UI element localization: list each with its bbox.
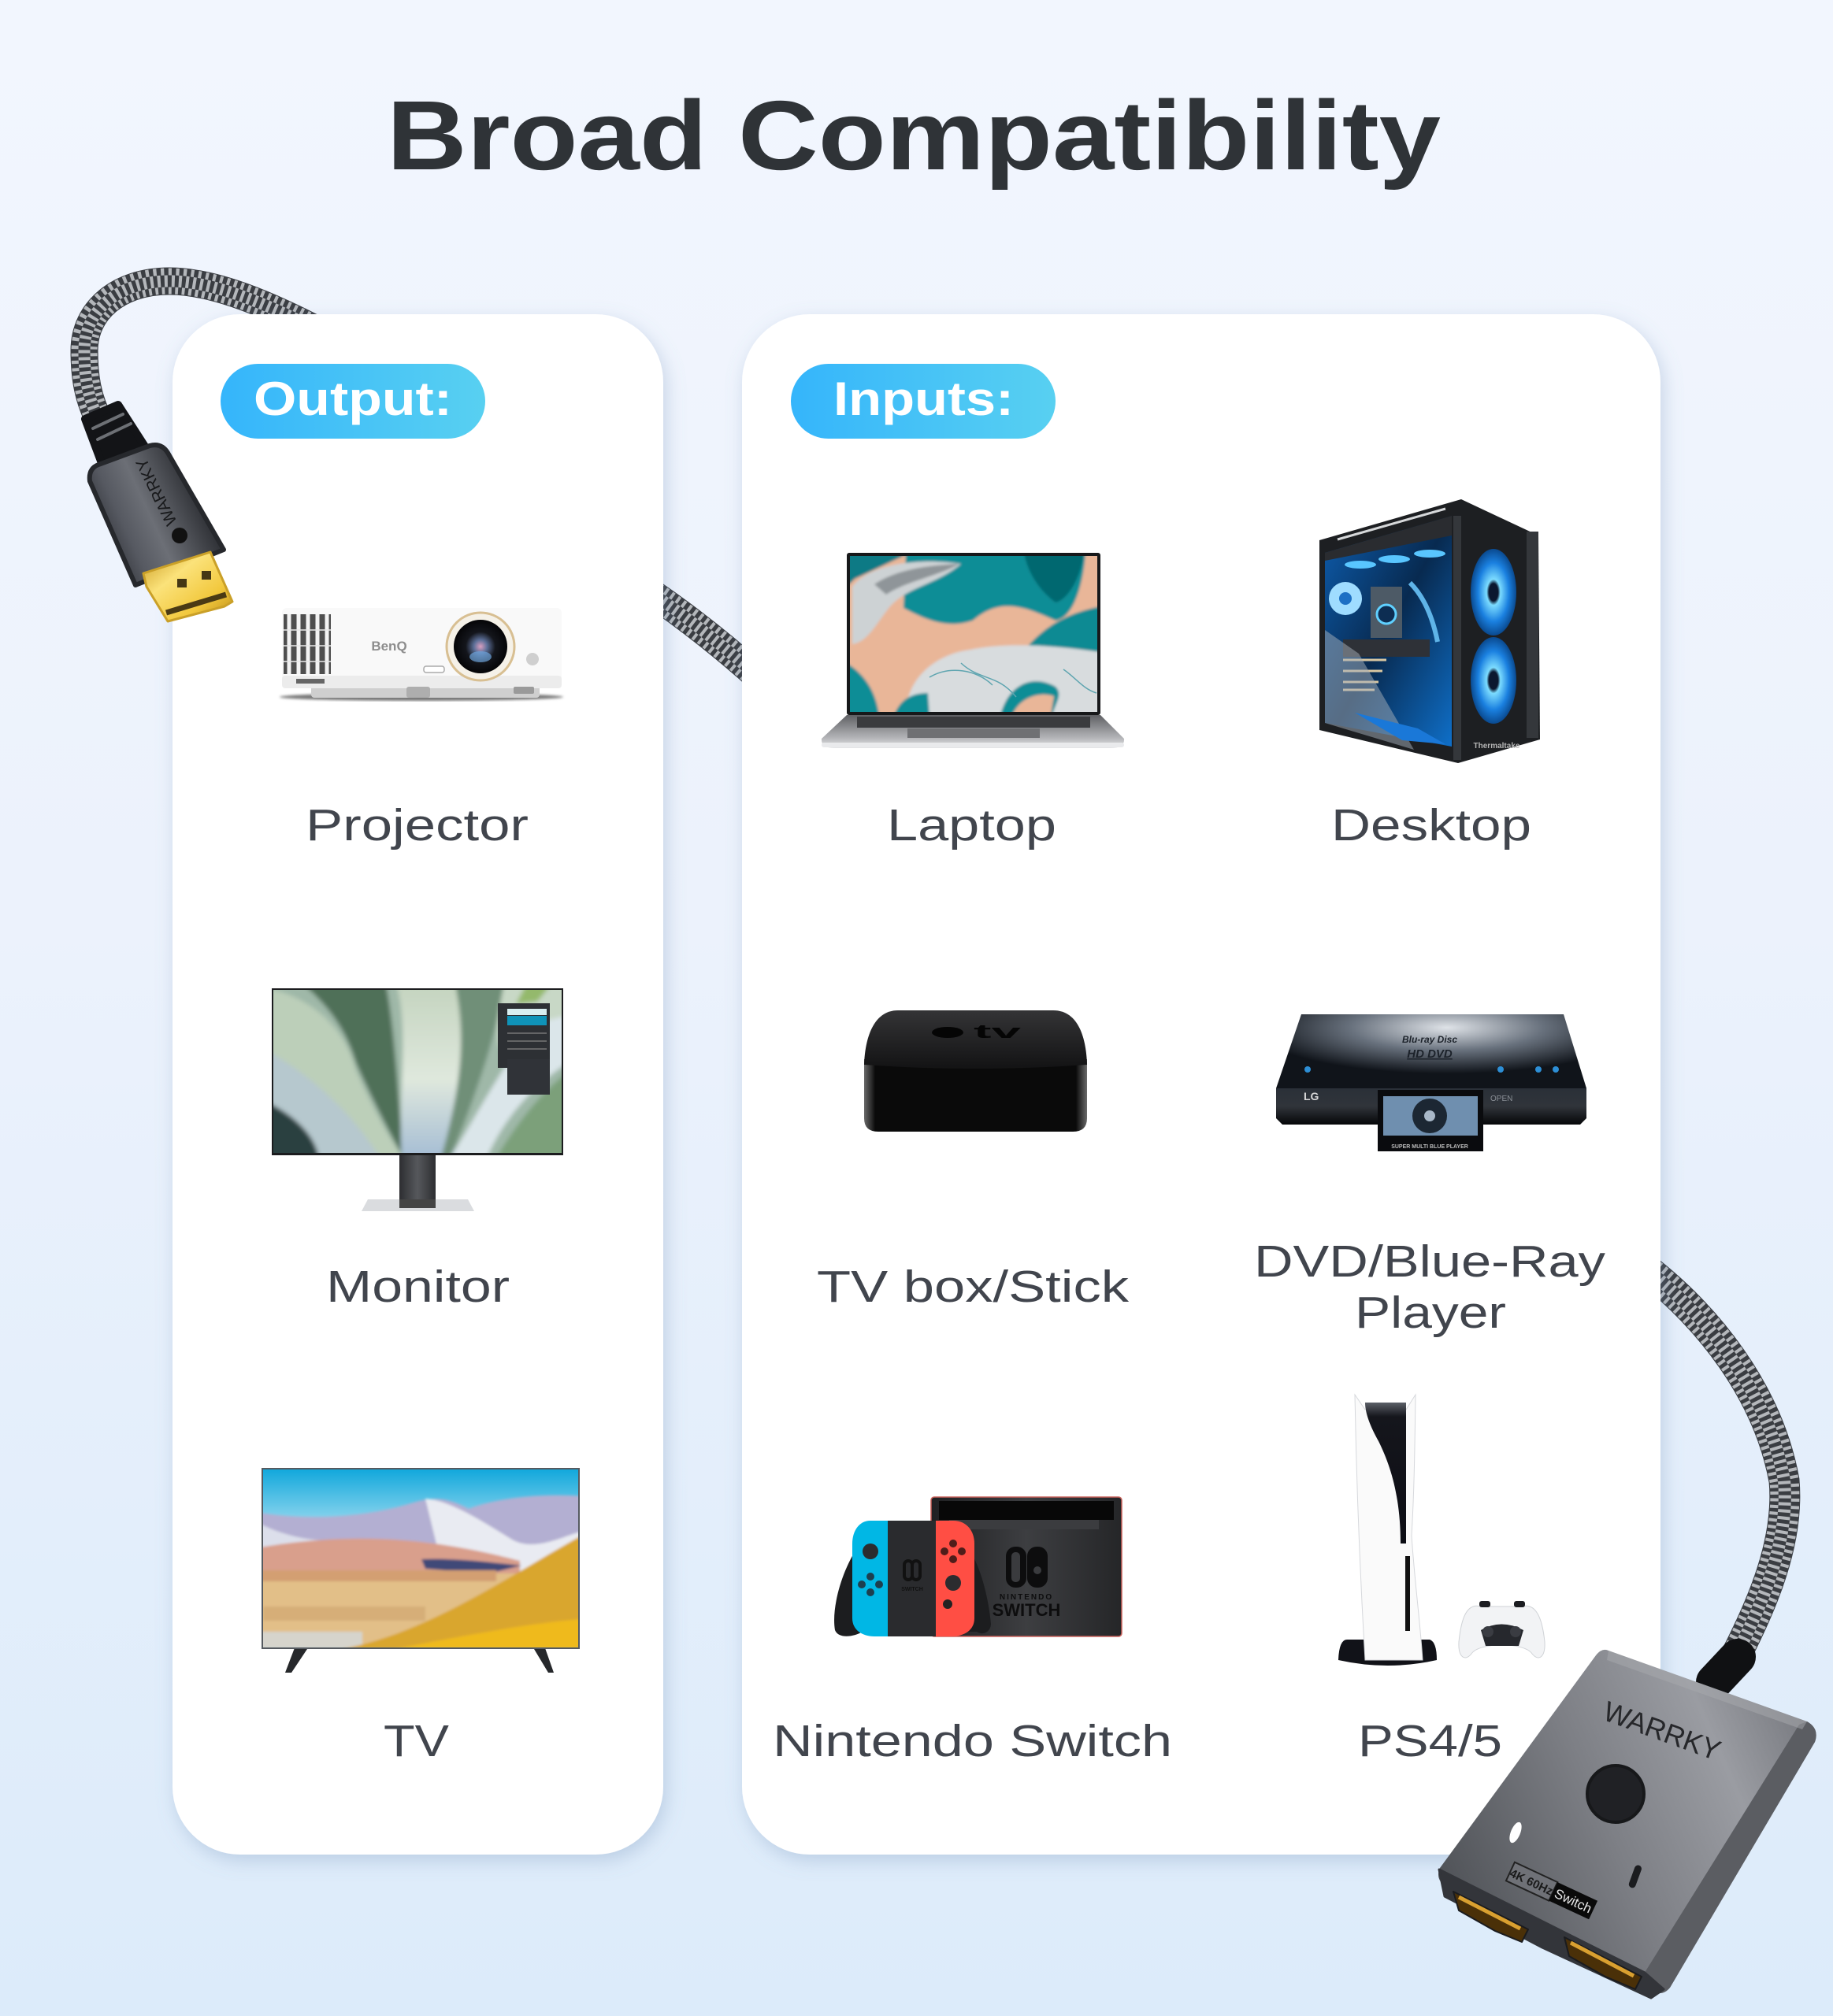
badge: inputs: Inputs: [833,372,1014,425]
device: Nintendo Switch: NINTENDO [1000,1593,1053,1602]
device: TV [260,1468,583,1673]
label: TV: TV [384,1716,449,1766]
HDMI switch adapter [1438,1650,1816,1998]
cable: link between cards [630,579,760,679]
device: Nintendo Switch: SWITCH [901,1587,923,1592]
HDMI plug: WARRKY [132,455,180,528]
device: projector [280,608,563,701]
panel: output [173,314,663,1855]
HDMI port left [1453,1892,1528,1942]
device: Blu-ray player: SUPER MULTI BLUE PLAYER [1391,1144,1468,1150]
device: Nintendo Switch [834,1497,1122,1636]
label: monitor: Monitor [326,1262,510,1312]
cable: output lead behind left card [84,281,331,417]
device: Blu-ray player: HD DVD [1407,1047,1453,1061]
device: Blu-ray player: OPEN [1490,1095,1512,1103]
resolution tag: 4K 60Hz [1508,1866,1555,1899]
device: desktop PC [1319,499,1540,763]
device: projector: BenQ [371,639,407,654]
badge: inputs [791,364,1056,439]
device: Blu-ray player: LG [1304,1090,1319,1102]
device: TV box [864,1010,1087,1132]
device: TV box: tv [974,1021,1022,1043]
device: PlayStation console and controller [1338,1395,1545,1666]
panel: inputs [742,314,1660,1855]
label: DVD/Blue-Ray player [1254,1236,1606,1338]
device: Nintendo Switch: SWITCH [993,1600,1060,1620]
label: laptop: Laptop [887,800,1056,850]
label: PS4/5: PS4/5 [1358,1716,1502,1766]
label: projector: Projector [306,800,529,850]
title: Broad Compatibility [387,81,1441,191]
label: DVD/Blue-Ray player: DVD/Blue-Ray [1254,1236,1606,1287]
device: laptop [822,553,1124,748]
label: TV box/stick: TV box/Stick [817,1262,1130,1312]
label: DVD/Blue-Ray player: Player [1355,1288,1506,1338]
cable: input lead to switch [1634,1260,1785,1654]
software window on monitor [498,1003,550,1095]
HDMI plug [85,405,232,621]
resolution tag: Switch [1552,1886,1594,1916]
device: Blu-ray player [1276,1014,1586,1151]
label: desktop: Desktop [1331,800,1531,850]
badge: output: Output: [254,372,452,425]
badge: output [221,364,485,439]
HDMI port right [1564,1937,1642,1989]
switch branding: WARRKY [1599,1695,1725,1767]
resolution tag [1506,1862,1597,1919]
device: desktop PC: Thermaltake [1474,742,1520,750]
label: Nintendo Switch: Nintendo Switch [773,1716,1172,1766]
device: Blu-ray player: Blu-ray Disc [1402,1034,1457,1045]
device: monitor [268,984,567,1211]
